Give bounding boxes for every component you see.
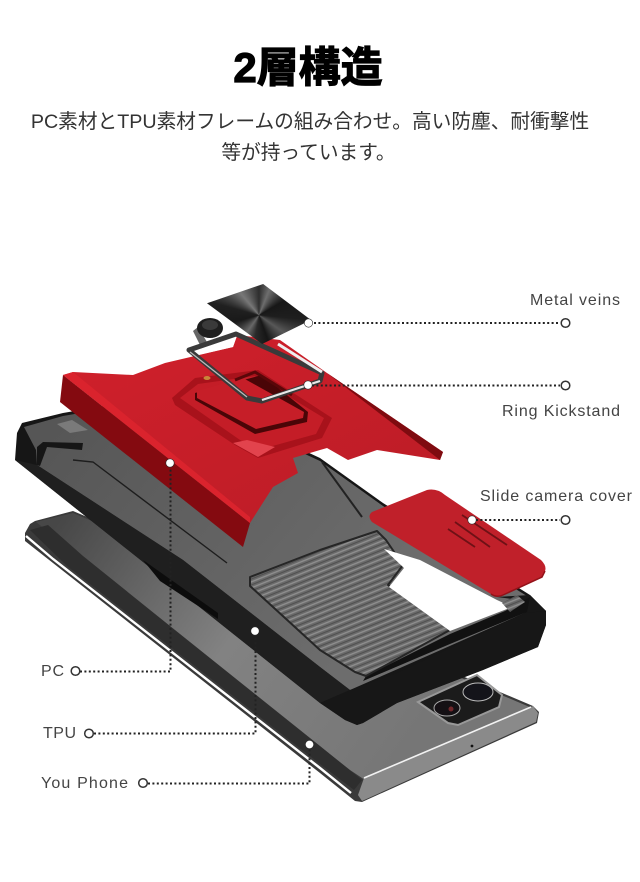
callout: metal veins: Metal veins — [530, 292, 620, 309]
callout: ring kickstand — [304, 381, 620, 420]
callout: you phone — [41, 740, 314, 792]
ring recess — [172, 370, 332, 458]
white window inside ring — [197, 336, 237, 355]
carbon fibre panel and rim — [250, 531, 530, 681]
callout: PC: PC — [41, 663, 64, 680]
callout: ring kickstand: Ring Kickstand — [502, 403, 620, 420]
red PC plate — [60, 335, 443, 547]
description text: PC素材とTPU素材フレームの組み合わせ。高い防塵、耐衝撃性 — [31, 111, 589, 133]
callout: slide camera cover — [468, 488, 633, 524]
description text — [31, 111, 589, 164]
metal disc — [207, 284, 311, 344]
callout: PC — [41, 459, 174, 680]
camera module — [418, 675, 502, 725]
callout: slide camera cover: Slide camera cover — [480, 488, 633, 505]
callout: TPU — [43, 627, 259, 742]
callout: TPU: TPU — [43, 725, 76, 742]
TPU / PC case body — [15, 393, 546, 725]
chrome ring — [189, 334, 322, 401]
hinge bolt — [193, 318, 223, 345]
phone body — [25, 511, 539, 802]
callout: metal veins — [304, 292, 620, 327]
title: 2層構造 — [233, 44, 383, 91]
description text: 等が持っています。 — [221, 142, 396, 164]
callout: you phone: You Phone — [41, 775, 128, 792]
slide camera cover — [370, 490, 546, 596]
